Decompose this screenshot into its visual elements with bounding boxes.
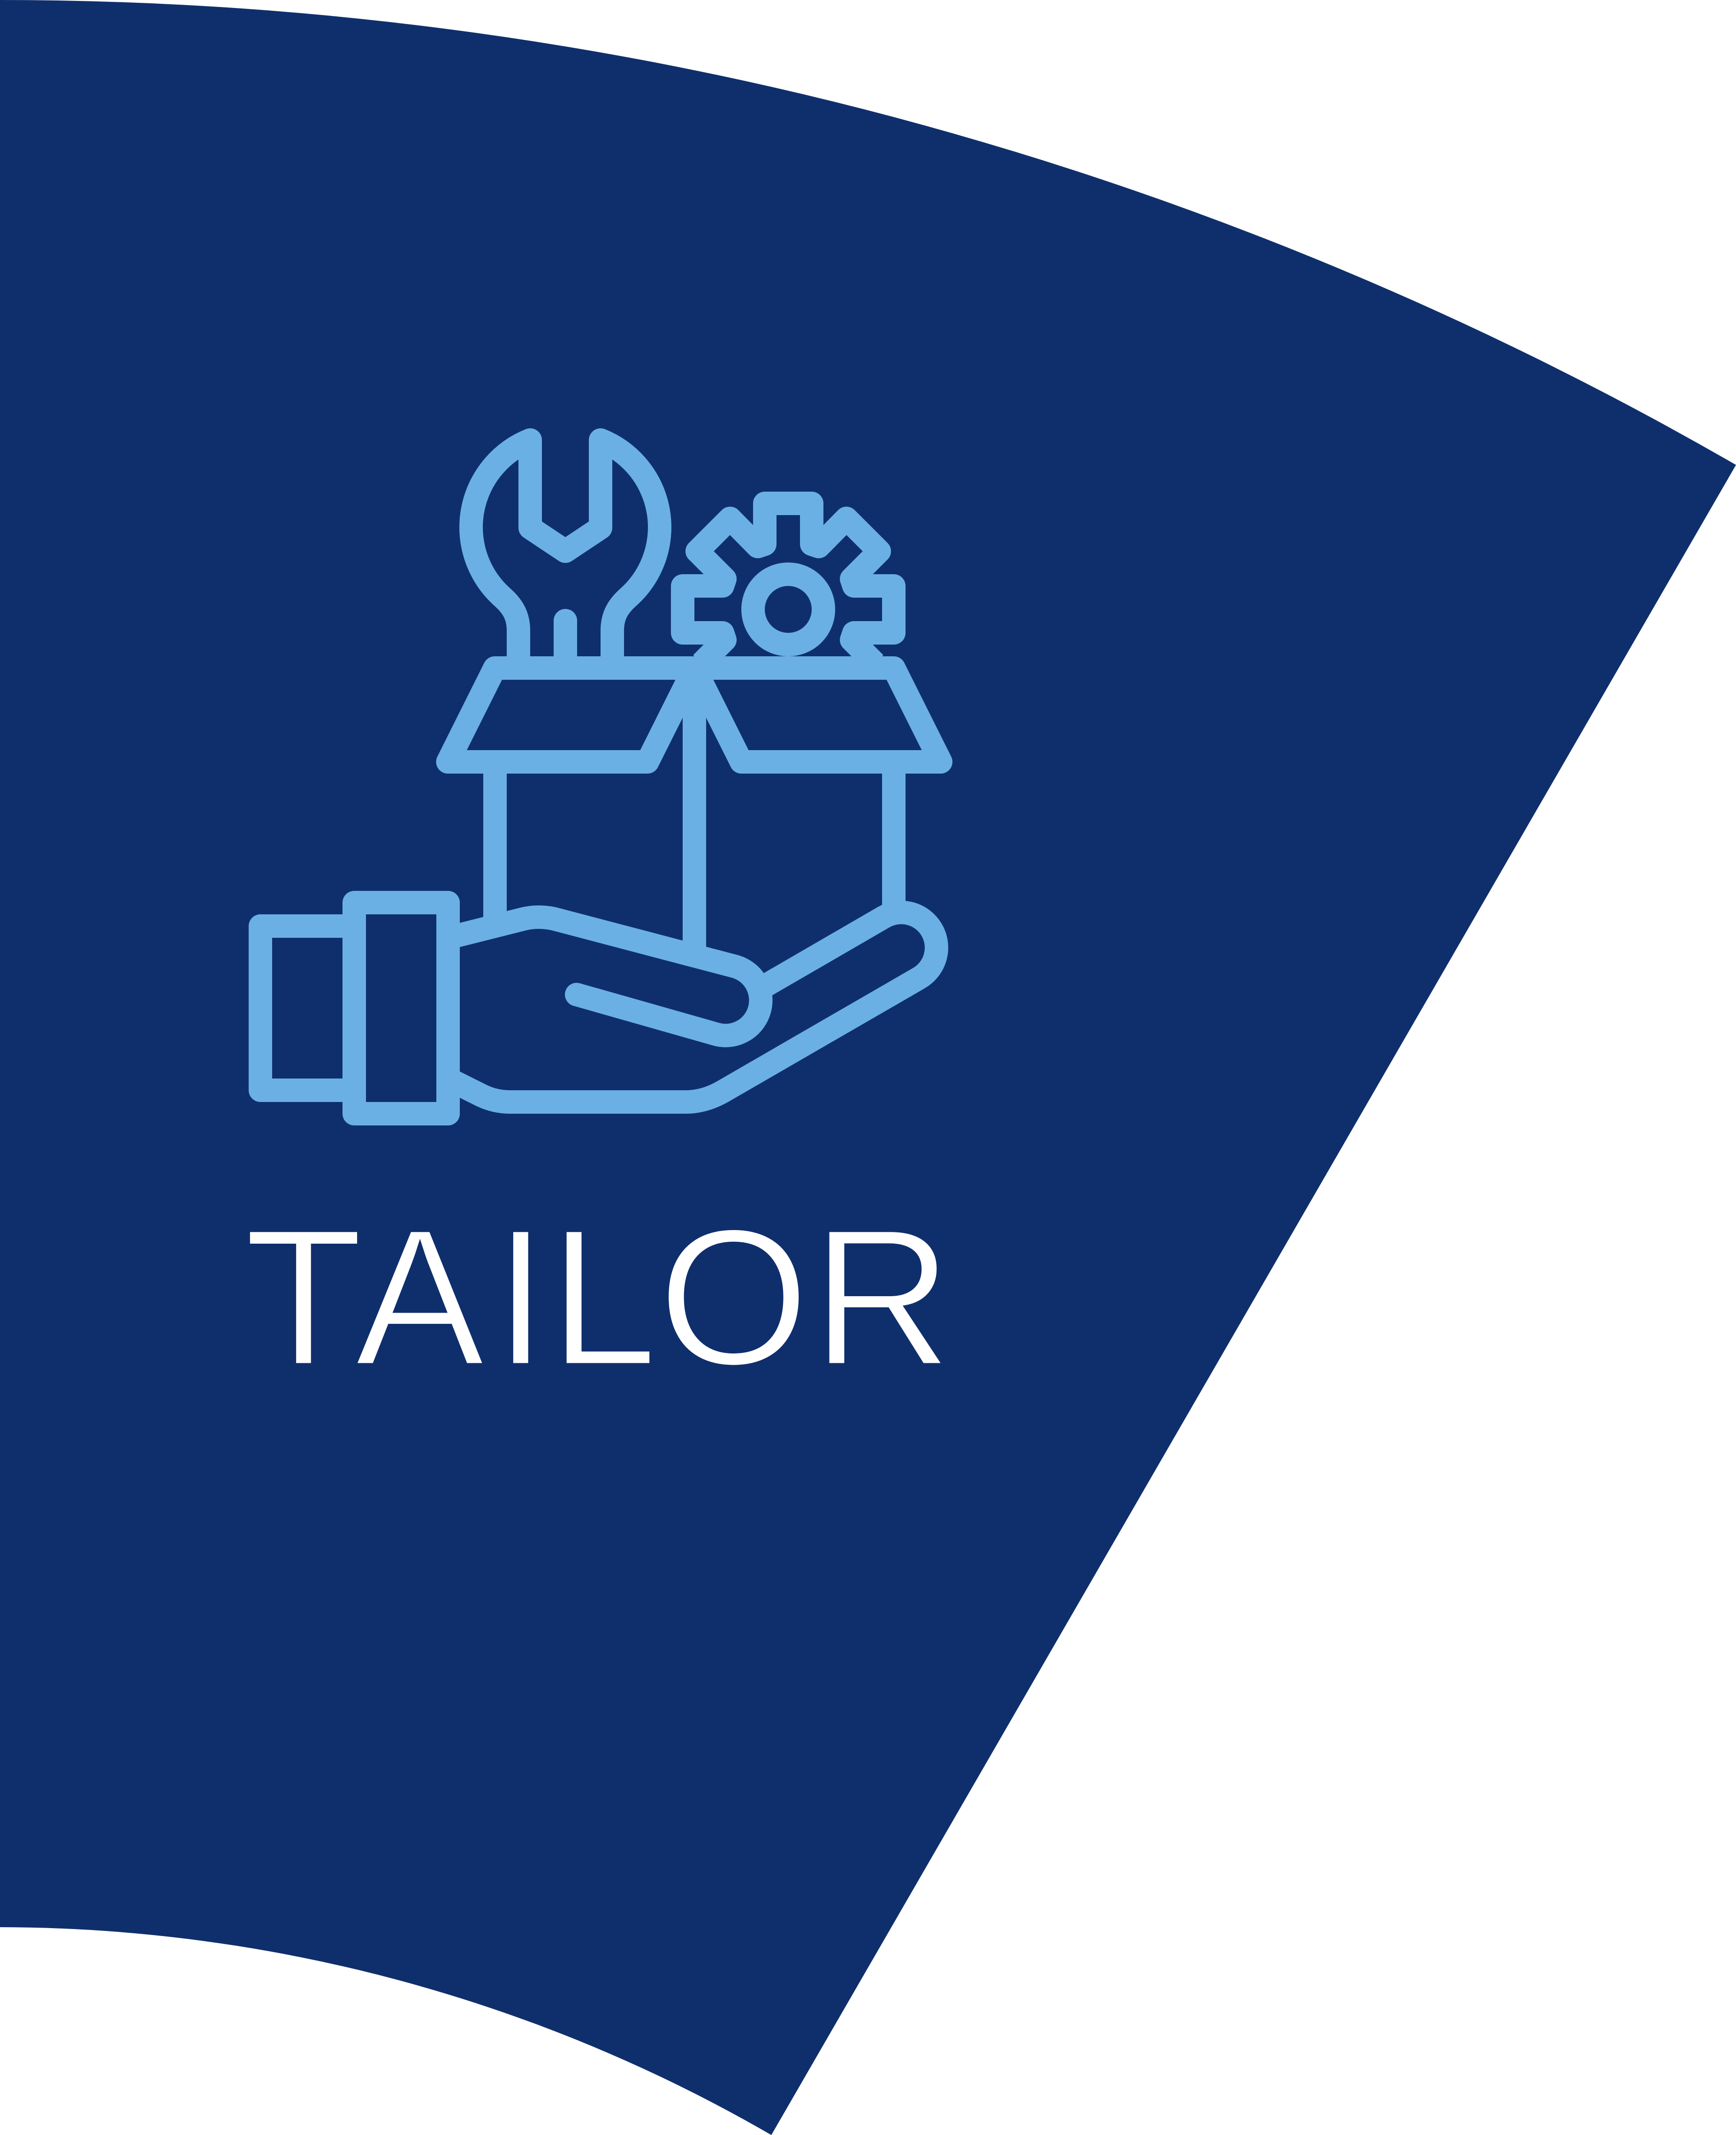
- icon part: cuff: [260, 903, 448, 1114]
- icon part: gear: [683, 503, 894, 663]
- heading: TAILOR: TAILOR: [244, 1188, 952, 1406]
- icon part: hand: [450, 912, 937, 1102]
- icon: hand holding box with wrench and gear: [260, 440, 941, 1114]
- icon part: wrench: [471, 440, 660, 668]
- icon part: open box: [448, 668, 941, 952]
